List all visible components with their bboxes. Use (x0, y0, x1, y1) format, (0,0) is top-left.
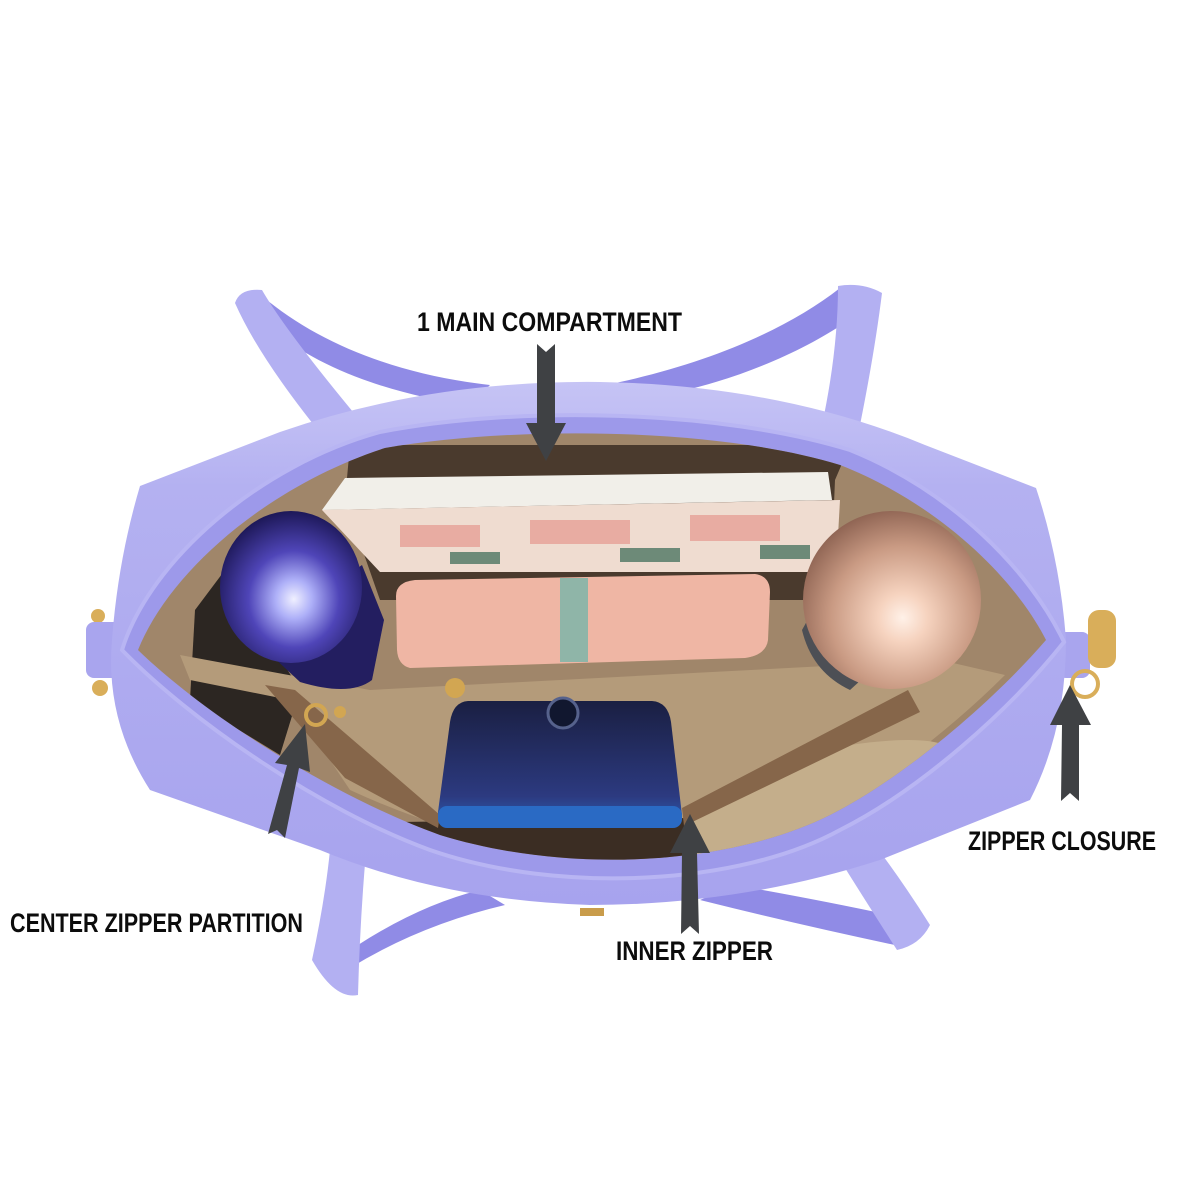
bag body (111, 382, 1066, 905)
arrow: main compartment (526, 344, 566, 461)
lining lower pocket (180, 655, 1005, 860)
zipper rim (122, 415, 1064, 878)
arrow: inner zipper (670, 814, 710, 934)
pink wallet (396, 574, 770, 668)
notebook (322, 472, 840, 572)
phone (438, 698, 682, 828)
dark bottom gap (406, 818, 684, 860)
label: center zipper partition: CENTER ZIPPER PARTITION (10, 908, 303, 938)
handle: top left (235, 290, 490, 445)
dark upper interior (345, 445, 850, 600)
zipper pull (306, 678, 465, 725)
label: inner zipper: INNER ZIPPER (616, 936, 773, 966)
handle: top right (590, 285, 882, 425)
rose gold bottle (802, 511, 981, 690)
gold hardware (86, 447, 1116, 916)
inner zipper tape left (265, 685, 440, 828)
handle: bottom right (700, 845, 930, 950)
arrow: zipper closure (1050, 685, 1091, 801)
purple bottle (220, 511, 384, 689)
inner zipper tape right (682, 690, 920, 826)
label: 1 main compartment: 1 MAIN COMPARTMENT (417, 307, 682, 337)
label: zipper closure: ZIPPER CLOSURE (968, 826, 1156, 856)
bag interior (138, 433, 1046, 860)
beige pad right (694, 740, 938, 854)
handle: bottom left (312, 850, 505, 996)
dark left gap (190, 576, 292, 755)
arrow: center zipper partition (268, 724, 310, 838)
